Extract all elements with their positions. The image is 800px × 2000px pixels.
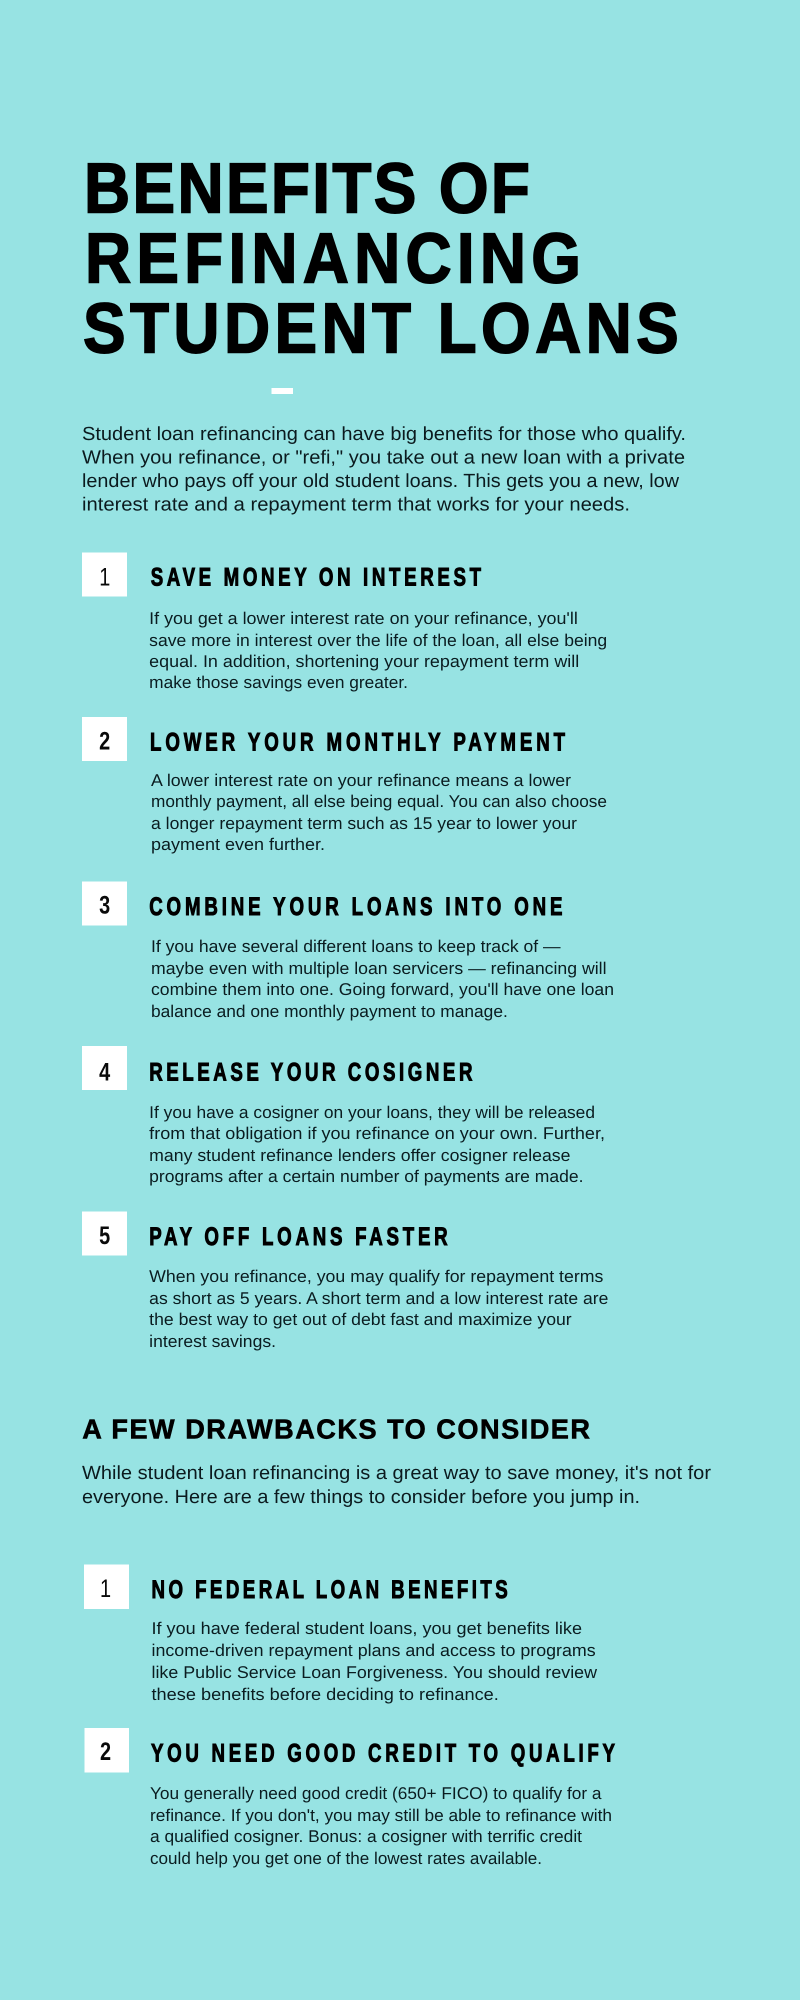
body text [149, 1267, 608, 1351]
body text: payment even further. [151, 835, 325, 854]
white dash accent [272, 388, 293, 394]
number badge 2: 2 [99, 728, 110, 756]
body text: If you have a cosigner on your loans, they will be released [149, 1103, 595, 1122]
body text: the best way to get out of debt fast and maximize your [149, 1310, 572, 1329]
body text: make those savings even greater. [149, 673, 408, 692]
intro paragraph [82, 424, 686, 516]
body text: maybe even with multiple loan servicers — refinancing will [151, 959, 606, 978]
body text [149, 609, 607, 692]
body text: If you have federal student loans, you get benefits like [152, 1619, 582, 1638]
body text: a qualified cosigner. Bonus: a cosigner with terrific credit [150, 1827, 582, 1846]
title: STUDENT LOANS [83, 290, 679, 368]
heading: release your cosigner: RELEASE YOUR COSIGNER [149, 1059, 472, 1087]
number badge 2 [84, 1728, 129, 1772]
body text: refinance. If you don't, you may still be able to refinance with [150, 1806, 612, 1825]
body text [152, 1619, 598, 1704]
number badge 4: 4 [99, 1058, 111, 1086]
panel: benefit 1 [82, 552, 607, 692]
body text: like Public Service Loan Forgiveness. You should review [152, 1663, 598, 1682]
intro paragraph: Student loan refinancing can have big benefits for those who qualify. [82, 424, 686, 445]
panel: benefit 5 [82, 1212, 608, 1351]
body text: could help you get one of the lowest rates available. [150, 1849, 542, 1868]
body text [151, 937, 614, 1021]
number badge 1: 1 [99, 564, 110, 592]
number badge 2: 2 [100, 1738, 111, 1766]
intro paragraph: When you refinance, or "refi," you take out a new loan with a private [82, 448, 685, 468]
body text: programs after a certain number of payments are made. [149, 1167, 583, 1186]
number badge 5 [82, 1212, 127, 1256]
number badge 2 [82, 717, 127, 761]
number badge 1: 1 [100, 1575, 111, 1603]
body text: You generally need good credit (650+ FICO) to qualify for a [150, 1784, 602, 1803]
panel: benefit 4 [82, 1046, 605, 1186]
body text [149, 1103, 605, 1186]
body text: a longer repayment term such as 15 year to lower your [151, 814, 577, 833]
number badge 1 [82, 552, 127, 596]
panel: benefit 2 [82, 717, 607, 854]
panel: benefit 3 [82, 882, 614, 1021]
body text: monthly payment, all else being equal. You can also choose [151, 792, 607, 811]
body text [151, 771, 607, 854]
drawbacks intro text [82, 1463, 712, 1508]
body text: many student refinance lenders offer cosigner release [149, 1146, 570, 1165]
heading: you need good credit to qualify: YOU NEED GOOD CREDIT TO QUALIFY [151, 1740, 615, 1768]
body text: When you refinance, you may qualify for repayment terms [149, 1267, 603, 1286]
body text: If you get a lower interest rate on your refinance, you'll [149, 609, 578, 628]
intro paragraph: lender who pays off your old student loans. This gets you a new, low [82, 471, 679, 492]
number badge 4 [82, 1046, 127, 1090]
title [83, 150, 679, 368]
title: BENEFITS OF [84, 150, 530, 228]
heading: no federal loan benefits: NO FEDERAL LOAN BENEFITS [152, 1576, 508, 1604]
body text: combine them into one. Going forward, you'll have one loan [151, 980, 614, 999]
number badge 3: 3 [99, 892, 110, 920]
drawbacks intro text: While student loan refinancing is a great way to save money, it's not for [82, 1463, 712, 1484]
body text: balance and one monthly payment to manage. [151, 1002, 508, 1021]
heading: combine your loans into one: COMBINE YOUR LOANS INTO ONE [149, 893, 562, 921]
heading: pay off loans faster: PAY OFF LOANS FASTER [149, 1223, 448, 1251]
body text: as short as 5 years. A short term and a low interest rate are [149, 1289, 608, 1308]
drawbacks intro text: everyone. Here are a few things to consider before you jump in. [82, 1487, 640, 1508]
panel: drawback 2 [84, 1728, 615, 1868]
number badge 1 [84, 1564, 129, 1609]
intro paragraph: interest rate and a repayment term that works for your needs. [82, 494, 630, 516]
body text: interest savings. [149, 1332, 276, 1351]
heading: lower your monthly payment: LOWER YOUR MONTHLY PAYMENT [150, 729, 565, 757]
body text: these benefits before deciding to refinance. [152, 1685, 499, 1704]
body text: equal. In addition, shortening your repayment term will [149, 652, 579, 671]
panel: drawback 1 [84, 1564, 598, 1704]
body text: If you have several different loans to keep track of — [151, 937, 561, 956]
section heading: drawbacks: A FEW DRAWBACKS TO CONSIDER [82, 1414, 590, 1445]
title: REFINANCING [85, 220, 581, 298]
number badge 5: 5 [99, 1222, 110, 1250]
number badge 3 [82, 882, 127, 926]
body text: income-driven repayment plans and access to programs [152, 1641, 596, 1660]
body text: from that obligation if you refinance on your own. Further, [149, 1124, 605, 1143]
body text: A lower interest rate on your refinance means a lower [151, 771, 571, 790]
body text: save more in interest over the life of the loan, all else being [149, 631, 607, 650]
body text [150, 1784, 612, 1868]
heading: save money on interest: SAVE MONEY ON INTEREST [151, 564, 481, 592]
